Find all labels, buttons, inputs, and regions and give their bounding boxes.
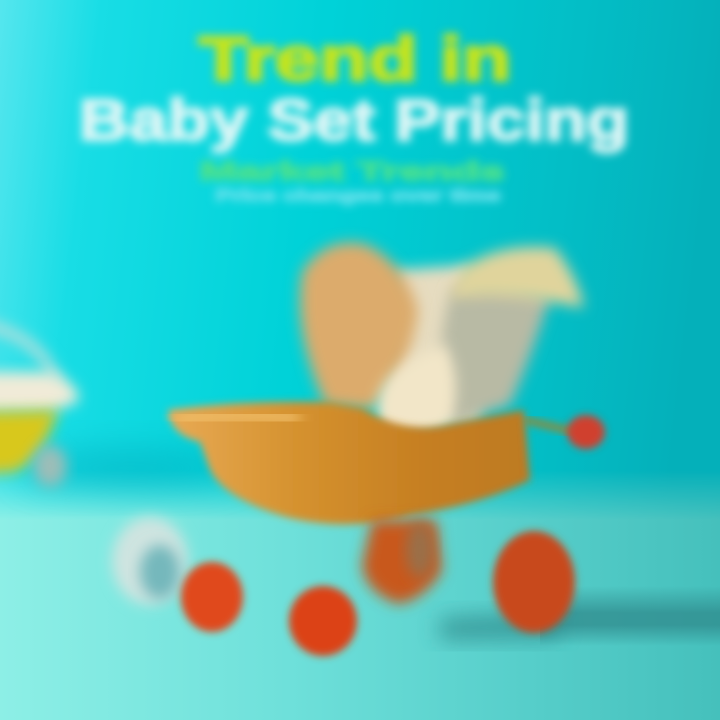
stroller hood top xyxy=(450,247,584,308)
shadow soft start xyxy=(440,612,560,640)
orange ball middle xyxy=(289,586,357,656)
stroller blanket xyxy=(377,345,456,434)
subtitle line: Market Trends xyxy=(200,156,504,186)
stroller right hood shade xyxy=(441,281,550,425)
basket wheel xyxy=(33,445,67,487)
stroller basket xyxy=(168,402,530,524)
stroller handle knob xyxy=(567,415,605,449)
basket cloth xyxy=(0,372,78,412)
stroller xyxy=(168,243,605,633)
caption line: Price changes over time xyxy=(216,186,500,205)
wall shadow band xyxy=(20,452,240,484)
title line: Trend in: Trend in xyxy=(199,25,511,94)
stroller rim highlight xyxy=(175,415,300,420)
stroller left hood xyxy=(300,243,418,410)
left basket xyxy=(0,322,78,487)
pale ball shade xyxy=(140,545,180,599)
front-left stand xyxy=(362,520,442,604)
title xyxy=(79,25,629,205)
shadow band to right edge xyxy=(540,586,720,646)
large rear wheel xyxy=(493,531,575,633)
stroller cream fill between hoods xyxy=(385,265,480,430)
floor xyxy=(0,470,720,720)
stand shade xyxy=(406,522,434,578)
stroller axle xyxy=(525,420,575,432)
orange ball left xyxy=(181,562,243,632)
pale ball xyxy=(112,517,188,605)
title line: Baby Set Pricing: Baby Set Pricing xyxy=(79,88,629,153)
basket body xyxy=(0,410,58,474)
floor shadow of stroller xyxy=(440,586,720,646)
balls xyxy=(112,517,357,656)
basket handle xyxy=(0,322,58,385)
